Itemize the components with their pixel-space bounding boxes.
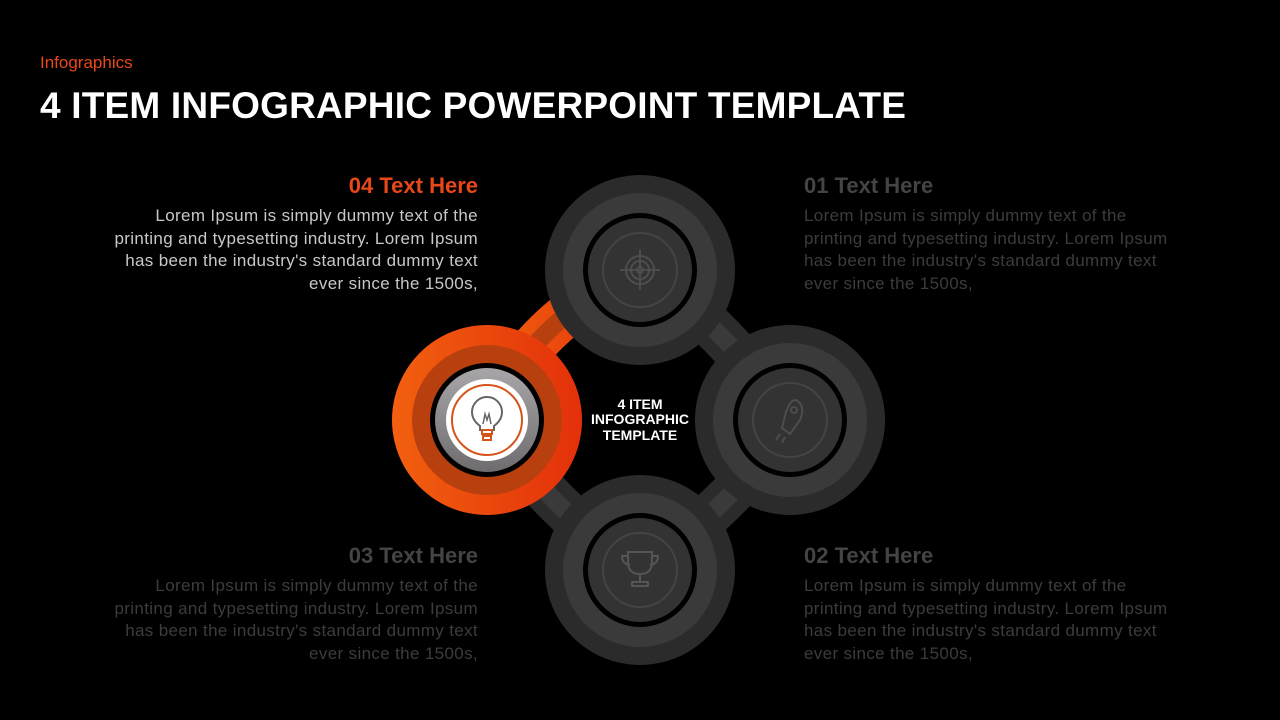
- circle 02 (right): [695, 325, 885, 515]
- item 01 text: ever since the 1500s,: [804, 274, 973, 293]
- item 02 text: 02 Text Here: [804, 543, 933, 568]
- icon: rocket: [776, 400, 802, 443]
- item 03 text: 03 Text Here: [349, 543, 478, 568]
- item 01 text: [804, 173, 1168, 293]
- item 02 text: Lorem Ipsum is simply dummy text of the: [804, 576, 1127, 595]
- circle 04 (left, active): [392, 325, 582, 515]
- circle 01 (top): [545, 175, 735, 365]
- item 02 text: [804, 543, 1168, 663]
- item 03 text: printing and typesetting industry. Lorem Ipsum: [114, 599, 478, 618]
- item 04 text: has been the industry's standard dummy text: [125, 251, 478, 270]
- icon: target: [620, 250, 660, 290]
- center label: TEMPLATE: [603, 427, 677, 443]
- item 01 text: printing and typesetting industry. Lorem Ipsum: [804, 229, 1168, 248]
- item 03 text: ever since the 1500s,: [309, 644, 478, 663]
- center label: 4 ITEM: [617, 396, 663, 412]
- item 04 text: printing and typesetting industry. Lorem Ipsum: [114, 229, 478, 248]
- subtitle: Infographics: [40, 53, 133, 72]
- item 04 text: [114, 173, 478, 293]
- item 04 text: ever since the 1500s,: [309, 274, 478, 293]
- item 03 text: [114, 543, 478, 663]
- item 03 text: has been the industry's standard dummy text: [125, 621, 478, 640]
- center label: [591, 396, 689, 443]
- icon: trophy: [622, 552, 658, 586]
- title: 4 ITEM INFOGRAPHIC POWERPOINT TEMPLATE: [40, 85, 906, 126]
- item 04 text: Lorem Ipsum is simply dummy text of the: [155, 206, 478, 225]
- item 01 text: 01 Text Here: [804, 173, 933, 198]
- circle 03 (bottom): [545, 475, 735, 665]
- item 03 text: Lorem Ipsum is simply dummy text of the: [155, 576, 478, 595]
- icon: light bulb: [472, 397, 502, 440]
- item 01 text: Lorem Ipsum is simply dummy text of the: [804, 206, 1127, 225]
- item 04 text: 04 Text Here: [349, 173, 478, 198]
- item 02 text: ever since the 1500s,: [804, 644, 973, 663]
- connectors: [487, 270, 790, 570]
- item 02 text: printing and typesetting industry. Lorem Ipsum: [804, 599, 1168, 618]
- item 01 text: has been the industry's standard dummy text: [804, 251, 1157, 270]
- item 02 text: has been the industry's standard dummy text: [804, 621, 1157, 640]
- center label: INFOGRAPHIC: [591, 411, 689, 427]
